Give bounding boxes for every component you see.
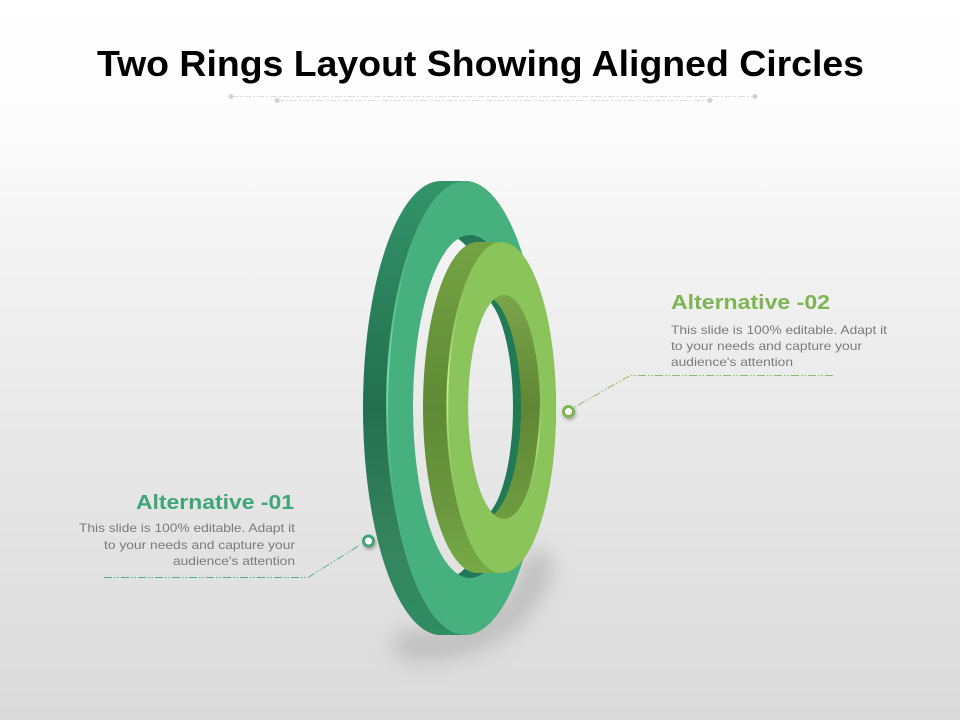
large ring inner wall [413,235,527,578]
ring shadow on floor [408,565,538,646]
small ring inner wall highlight [528,407,540,490]
text block: alternative 01 [79,521,296,568]
large ring front face [387,181,543,635]
callout: alternative 02 [564,292,888,416]
text block: alternative 02: audience's attention [671,355,793,369]
marker: alternative 01 [364,536,374,546]
text block: alternative 01: to your needs and capture your [104,538,295,552]
large ring side wall [363,181,543,635]
callout: alternative 01 [79,492,374,578]
small ring edge highlight [447,290,464,500]
text block: alternative 02: to your needs and capture your [671,339,862,353]
large green ring [363,181,524,635]
large ring wall seen through small ring [468,300,521,514]
marker: alternative 02 [564,406,574,416]
large ring edge highlight [387,230,417,520]
title ornament: dotted lines [228,94,758,103]
large ring see-through opening [413,238,466,574]
text block: alternative 01: audience's attention [173,554,295,568]
title: Two Rings Layout Showing Aligned Circles [97,43,864,84]
text block: alternative 02: This slide is 100% editable. Adapt it [671,323,888,337]
small ring see-through opening [468,302,513,512]
small ring side wall [423,242,556,573]
text block: alternative 02 [671,323,888,369]
heading: alternative 01: Alternative -01 [136,492,294,514]
heading: alternative 02: Alternative -02 [671,292,830,314]
text block: alternative 01: This slide is 100% editable. Adapt it [79,521,296,535]
small ring inner wall [468,295,540,519]
small ring front face [447,242,556,573]
connector line: alternative 01 [104,545,360,578]
connector line: alternative 02 [575,376,833,407]
small light-green ring [423,242,556,573]
